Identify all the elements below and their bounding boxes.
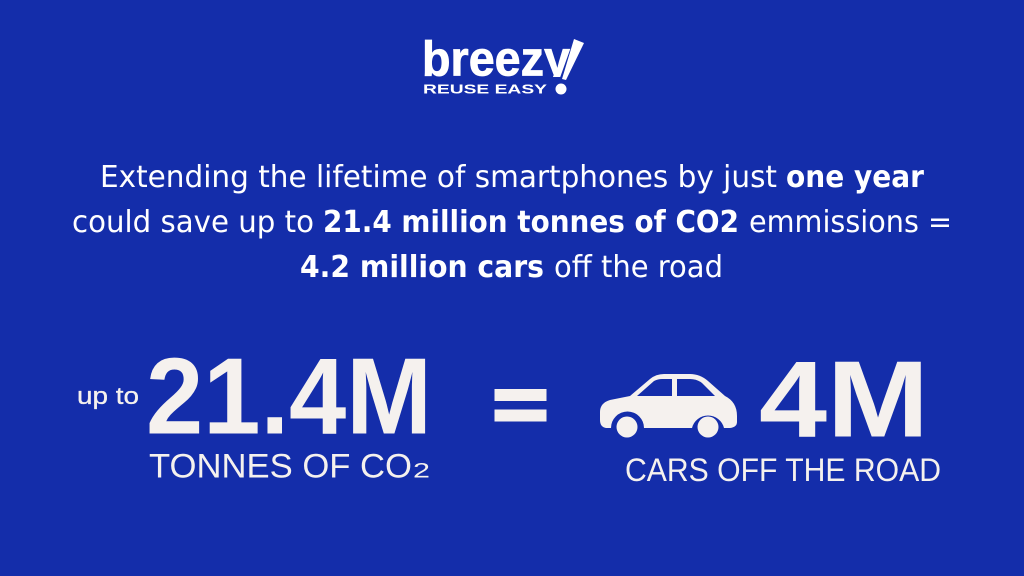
- headline text block: [72, 160, 952, 285]
- headline text block: emmissions =: [749, 205, 952, 240]
- stat: 4M cars off the road: CARS OFF THE ROAD: [625, 452, 941, 488]
- logo: breezy: breezy: [422, 32, 570, 86]
- infographic canvas: [74, 39, 949, 482]
- stat: 4M cars off the road: [625, 338, 941, 488]
- headline text block: 4.2 million cars: [300, 250, 544, 285]
- headline text block: Extending the lifetime of smartphones by just: [100, 160, 777, 195]
- stat: 21.4M tonnes of CO2: [77, 336, 432, 486]
- icon: car: [600, 374, 737, 438]
- stat: 4M cars off the road: 4M: [759, 338, 929, 460]
- stat: 21.4M tonnes of CO2: TONNES OF CO: [149, 448, 412, 486]
- equals sign: [494, 389, 546, 422]
- headline text block: could save up to: [72, 205, 314, 240]
- logo: breezy: REUSE EASY: [423, 82, 548, 96]
- headline text block: off the road: [554, 250, 723, 285]
- headline text block: 21.4 million tonnes of CO2: [323, 205, 739, 240]
- stat: 21.4M tonnes of CO2: 2: [413, 460, 430, 482]
- headline text block: one year: [786, 160, 924, 195]
- stat: 21.4M tonnes of CO2: 21.4M: [146, 336, 432, 458]
- stat: 21.4M tonnes of CO2: up to: [77, 383, 139, 410]
